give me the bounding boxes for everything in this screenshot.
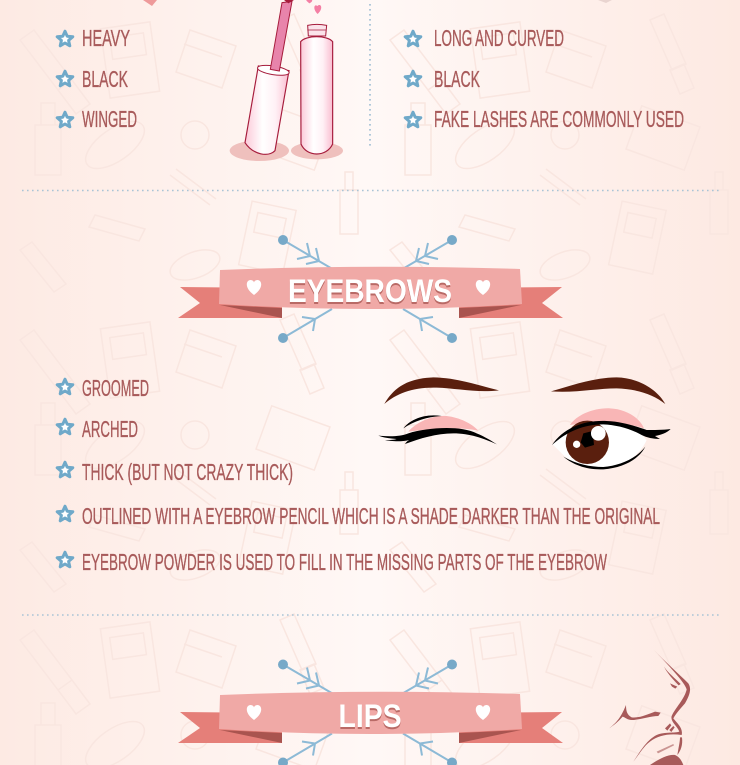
- panel: eyelashes list: BLACK: [434, 66, 480, 92]
- icon: mascara tubes: [230, 0, 343, 161]
- panel: eyelashes list: [405, 25, 684, 132]
- divider: vertical dotted: [369, 4, 371, 148]
- heading: lips banner: LIPS: [338, 698, 402, 734]
- panel: eyelashes list: LONG AND CURVED: [434, 25, 564, 51]
- panel: eyebrows list: THICK (BUT NOT CRAZY THICK): [82, 459, 293, 485]
- heading: eyebrows banner: EYEBROWS: [288, 273, 452, 309]
- panel: eyebrows list: GROOMED: [82, 375, 149, 401]
- heading: lips banner: [178, 660, 563, 765]
- heading: eyebrows banner: [178, 235, 563, 343]
- top fragments of cropped decoration: [143, 0, 612, 6]
- panel: eyebrows list: ARCHED: [82, 416, 138, 442]
- heading: lips banner: LIPS: [338, 700, 402, 736]
- divider: section two: [22, 614, 720, 616]
- heading: eyebrows banner: EYEBROWS: [288, 275, 452, 311]
- icon: face profile illustration: [609, 649, 690, 765]
- panel: eyeliner list: BLACK: [82, 66, 128, 92]
- icon: eyes and eyebrows: [378, 377, 671, 469]
- divider: section one: [22, 190, 720, 192]
- panel: eyeliner list: HEAVY: [82, 25, 130, 51]
- panel: eyeliner list: [57, 25, 137, 132]
- panel: eyeliner list: WINGED: [82, 106, 137, 132]
- panel: eyebrows list: [57, 375, 660, 575]
